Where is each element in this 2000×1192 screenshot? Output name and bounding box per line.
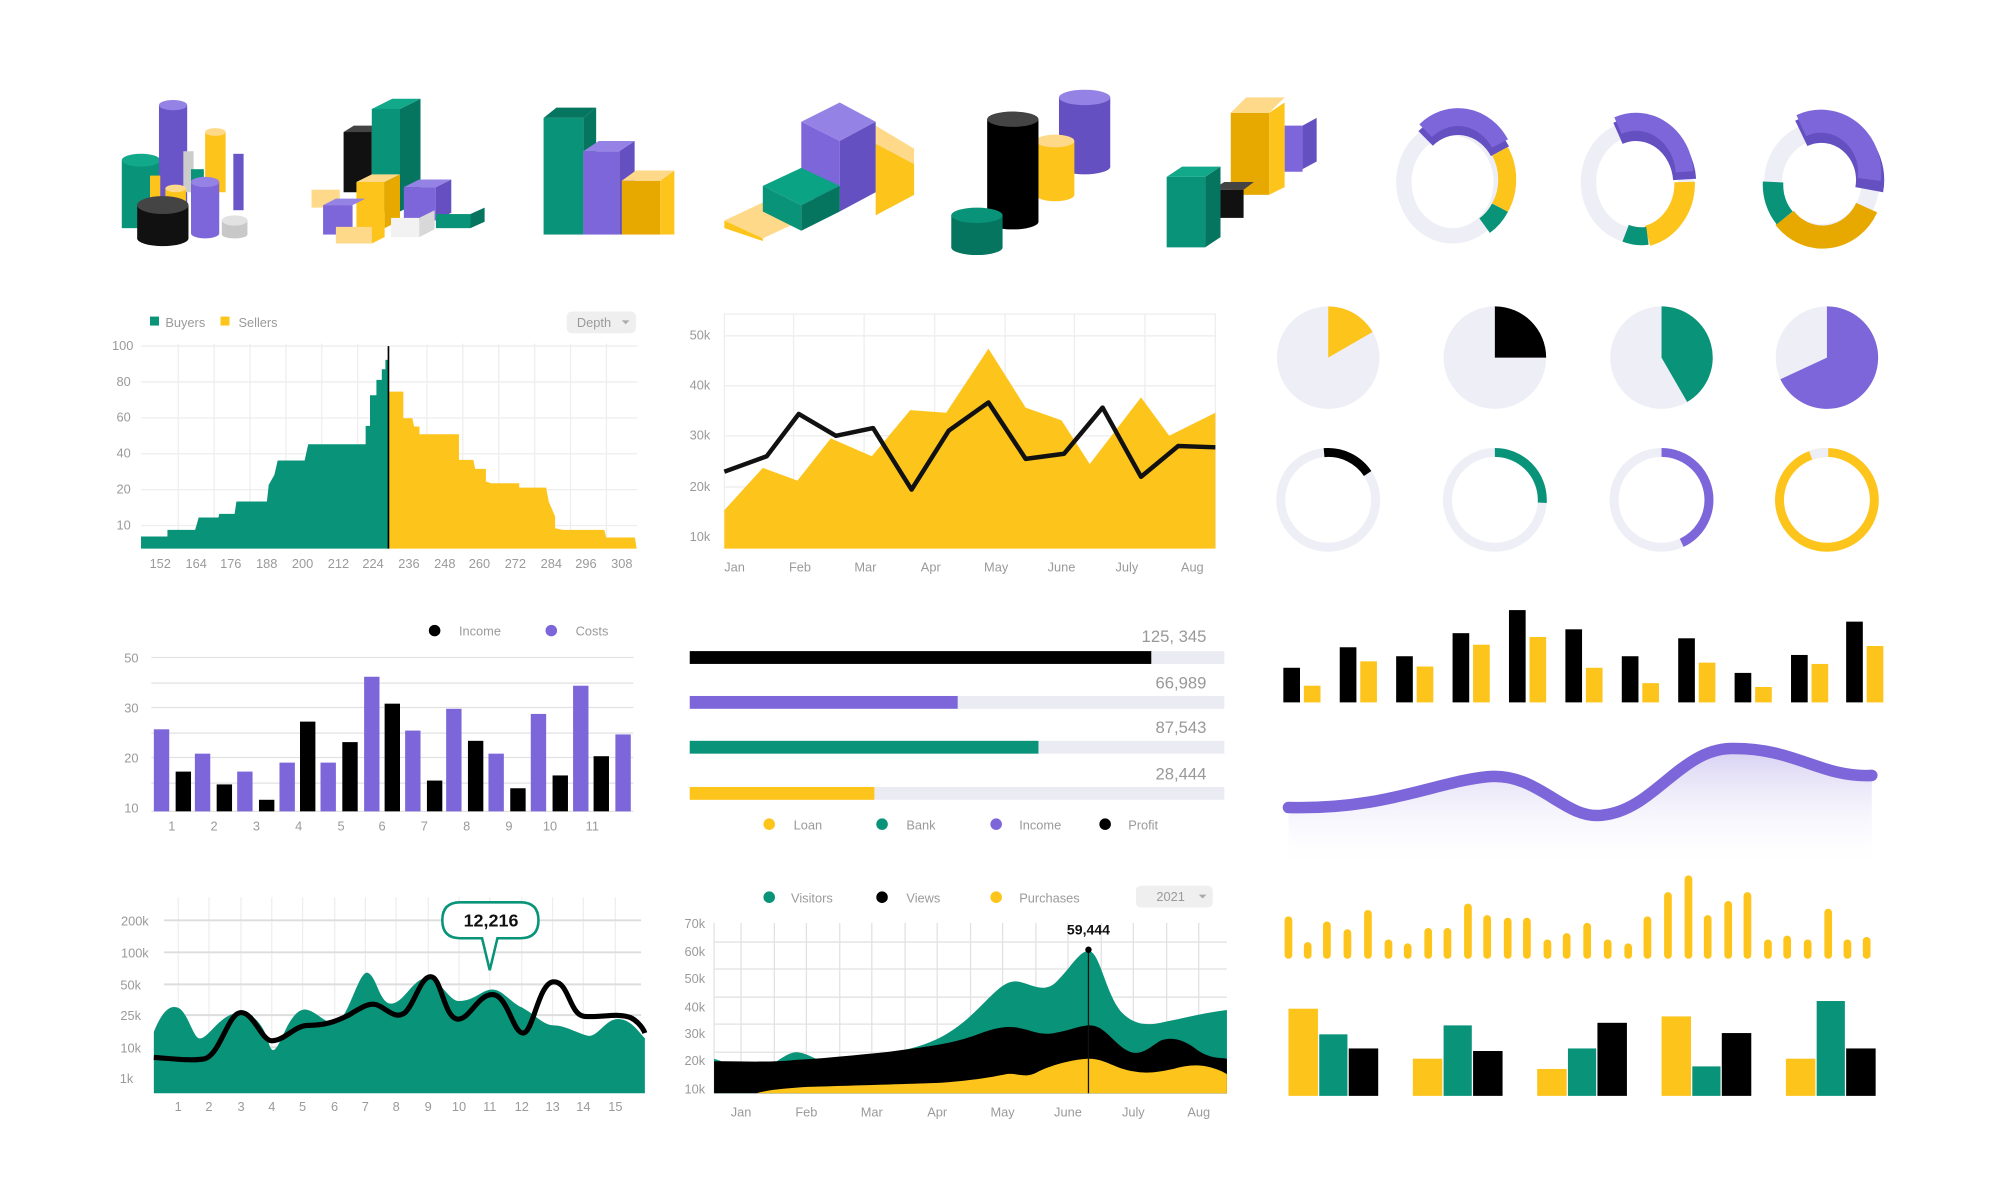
depth chart: buyers vs sellers: 284 — [541, 556, 562, 571]
horizontal progress bars: 87,543 — [1155, 718, 1206, 737]
wave area chart with callout: 4 — [268, 1099, 275, 1114]
wave area chart with callout: 9 — [425, 1099, 432, 1114]
depth chart: buyers vs sellers: 10 — [117, 517, 131, 532]
callout: 12,216: 12,216 — [464, 911, 518, 931]
area + line chart: monthly: 30k — [690, 428, 711, 443]
depth chart: buyers vs sellers: 236 — [398, 556, 420, 571]
wave area chart with callout: 1k — [120, 1071, 134, 1086]
callout: 12,216 — [442, 902, 538, 970]
stacked area chart: visitors views purchases: 50k — [684, 971, 706, 986]
depth chart: buyers vs sellers: 164 — [185, 556, 207, 571]
pie charts row — [1277, 306, 1878, 409]
stacked area chart: visitors views purchases: June — [1054, 1104, 1082, 1119]
depth chart: buyers vs sellers: 212 — [328, 556, 349, 571]
area + line chart: monthly: Feb — [789, 560, 811, 575]
bar chart: income vs costs: 5 — [337, 819, 345, 834]
stacked area chart: visitors views purchases: 10k — [684, 1081, 706, 1096]
depth chart: buyers vs sellers: 308 — [611, 556, 632, 571]
bar chart: income vs costs — [124, 624, 633, 834]
grouped bars: yellow teal black — [1288, 1001, 1876, 1096]
horizontal progress bars: 125, 345 — [1142, 627, 1206, 646]
ring progress charts — [1277, 439, 1888, 561]
3d chart: three prisms — [544, 108, 674, 235]
depth chart: buyers vs sellers: 248 — [434, 556, 456, 571]
depth chart: buyers vs sellers: 260 — [469, 556, 490, 571]
stacked area chart: visitors views purchases: Aug — [1187, 1104, 1210, 1119]
stacked area chart: visitors views purchases: Jan — [731, 1104, 751, 1119]
area + line chart: monthly: June — [1048, 560, 1075, 575]
callout: 59,444: 59,444 — [1067, 921, 1110, 937]
wave area chart with callout: 200k — [121, 913, 149, 928]
stacked area chart: visitors views purchases: July — [1122, 1104, 1145, 1119]
wave area chart with callout: 10 — [452, 1099, 466, 1114]
3d chart: cylinders — [951, 90, 1110, 255]
bar chart: income vs costs: 7 — [421, 819, 428, 834]
bar chart: income vs costs: 10 — [124, 801, 138, 816]
legend: loan bank income profit: Bank — [906, 817, 936, 832]
wave area chart with callout: 1 — [175, 1099, 182, 1114]
bar chart: income vs costs: 2 — [211, 819, 218, 834]
wave area chart with callout: 10k — [120, 1040, 142, 1055]
area + line chart: monthly: 20k — [690, 479, 711, 494]
callout: 59,444 — [1067, 921, 1110, 953]
wave line chart — [1288, 748, 1872, 872]
wave area chart with callout: 8 — [393, 1099, 400, 1114]
stacked area chart: visitors views purchases: Feb — [795, 1104, 817, 1119]
bar chart: income vs costs: 6 — [378, 819, 386, 834]
wave area chart with callout: 25k — [120, 1008, 142, 1023]
area + line chart: monthly: July — [1116, 560, 1139, 575]
3d donut 1 — [1404, 117, 1507, 236]
legend: income costs: Income — [459, 624, 501, 639]
3d chart: boxes cluster — [312, 99, 485, 244]
horizontal progress bars — [690, 627, 1224, 832]
depth chart: buyers vs sellers: 296 — [575, 556, 597, 571]
depth chart: buyers vs sellers: 272 — [505, 556, 526, 571]
wave area chart with callout: 11 — [483, 1099, 496, 1114]
wave area chart with callout: 2 — [205, 1099, 213, 1114]
area + line chart: monthly: Mar — [854, 560, 877, 575]
depth chart: buyers vs sellers: 60 — [117, 410, 131, 425]
dropdown: 2021: 2021 — [1156, 889, 1185, 904]
bar chart: income vs costs: 3 — [253, 819, 260, 834]
depth chart: buyers vs sellers: 100 — [112, 338, 133, 353]
wave area chart with callout: 7 — [362, 1099, 369, 1114]
horizontal progress bars: 28,444 — [1155, 764, 1206, 783]
3d chart: mixed boxes — [1167, 97, 1317, 247]
stacked area chart: visitors views purchases: Mar — [861, 1104, 884, 1119]
stacked area chart: visitors views purchases: 60k — [684, 944, 706, 959]
wave area chart with callout: 100k — [121, 945, 149, 960]
area + line chart: monthly: 40k — [690, 378, 711, 393]
legend: income costs — [429, 624, 608, 639]
wave area chart with callout — [120, 897, 645, 1114]
legend: loan bank income profit: Profit — [1128, 817, 1159, 832]
3d donut 3 — [1773, 121, 1871, 237]
depth chart: buyers vs sellers: 80 — [117, 374, 131, 389]
legend: income costs: Costs — [576, 624, 608, 639]
legend: visitors views purchases: Views — [906, 890, 940, 905]
legend: buyers sellers — [150, 315, 278, 330]
depth chart: buyers vs sellers: 188 — [256, 556, 277, 571]
area + line chart: monthly — [690, 314, 1215, 575]
area + line chart: monthly: May — [984, 560, 1009, 575]
stacked area chart: visitors views purchases: 20k — [684, 1053, 706, 1068]
depth chart: buyers vs sellers: 20 — [117, 481, 131, 496]
grouped bars: black and yellow — [1283, 610, 1883, 702]
dropdown: depth: Depth — [577, 315, 611, 330]
bar chart: income vs costs: 20 — [124, 751, 138, 766]
stacked area chart: visitors views purchases: 70k — [684, 916, 706, 931]
bar chart: income vs costs: 4 — [295, 819, 302, 834]
wave area chart with callout: 13 — [545, 1099, 560, 1114]
wave area chart with callout: 14 — [576, 1099, 590, 1114]
wave area chart with callout: 50k — [120, 977, 142, 992]
wave area chart with callout: 15 — [608, 1099, 623, 1114]
3d donut 2 — [1588, 122, 1686, 236]
legend: buyers sellers: Sellers — [238, 315, 278, 330]
area + line chart: monthly: Jan — [724, 560, 745, 575]
stacked area chart: visitors views purchases — [684, 886, 1227, 1119]
depth chart: buyers vs sellers: 152 — [150, 556, 171, 571]
stacked area chart: visitors views purchases: 40k — [684, 999, 706, 1014]
dropdown: depth — [567, 311, 636, 333]
bar chart: income vs costs: 30 — [124, 701, 138, 716]
depth chart: buyers vs sellers: 200 — [292, 556, 313, 571]
legend: visitors views purchases — [763, 890, 1080, 905]
legend: visitors views purchases: Visitors — [791, 890, 833, 905]
area + line chart: monthly: 50k — [690, 328, 711, 343]
legend: loan bank income profit: Income — [1019, 817, 1061, 832]
horizontal progress bars: 66,989 — [1155, 673, 1206, 692]
bar chart: income vs costs: 1 — [168, 819, 175, 834]
3d chart: isometric steps — [724, 103, 914, 241]
depth chart: buyers vs sellers: 176 — [220, 556, 241, 571]
bar chart: income vs costs: 50 — [124, 651, 138, 666]
wave area chart with callout: 6 — [331, 1099, 338, 1114]
bar chart: income vs costs: 8 — [463, 819, 470, 834]
bar chart: income vs costs: 11 — [586, 819, 599, 834]
3d chart: cylinders cluster — [122, 100, 247, 246]
legend: loan bank income profit: Loan — [794, 817, 822, 832]
depth chart: buyers vs sellers — [112, 311, 637, 571]
legend: loan bank income profit — [763, 817, 1159, 832]
dropdown: 2021 — [1136, 886, 1213, 907]
depth chart: buyers vs sellers: 224 — [362, 556, 384, 571]
thin yellow bars — [1288, 879, 1867, 955]
bar chart: income vs costs: 9 — [505, 819, 513, 834]
area + line chart: monthly: Apr — [921, 560, 941, 575]
bar chart: income vs costs: 10 — [543, 819, 557, 834]
wave area chart with callout: 3 — [237, 1099, 245, 1114]
stacked area chart: visitors views purchases: 30k — [684, 1026, 706, 1041]
stacked area chart: visitors views purchases: May — [990, 1104, 1015, 1119]
area + line chart: monthly: Aug — [1181, 560, 1204, 575]
legend: visitors views purchases: Purchases — [1019, 890, 1080, 905]
wave area chart with callout: 5 — [299, 1099, 306, 1114]
stacked area chart: visitors views purchases: Apr — [927, 1104, 948, 1119]
legend: buyers sellers: Buyers — [165, 315, 205, 330]
wave area chart with callout: 12 — [515, 1099, 529, 1114]
depth chart: buyers vs sellers: 40 — [117, 446, 131, 461]
area + line chart: monthly: 10k — [690, 529, 711, 544]
